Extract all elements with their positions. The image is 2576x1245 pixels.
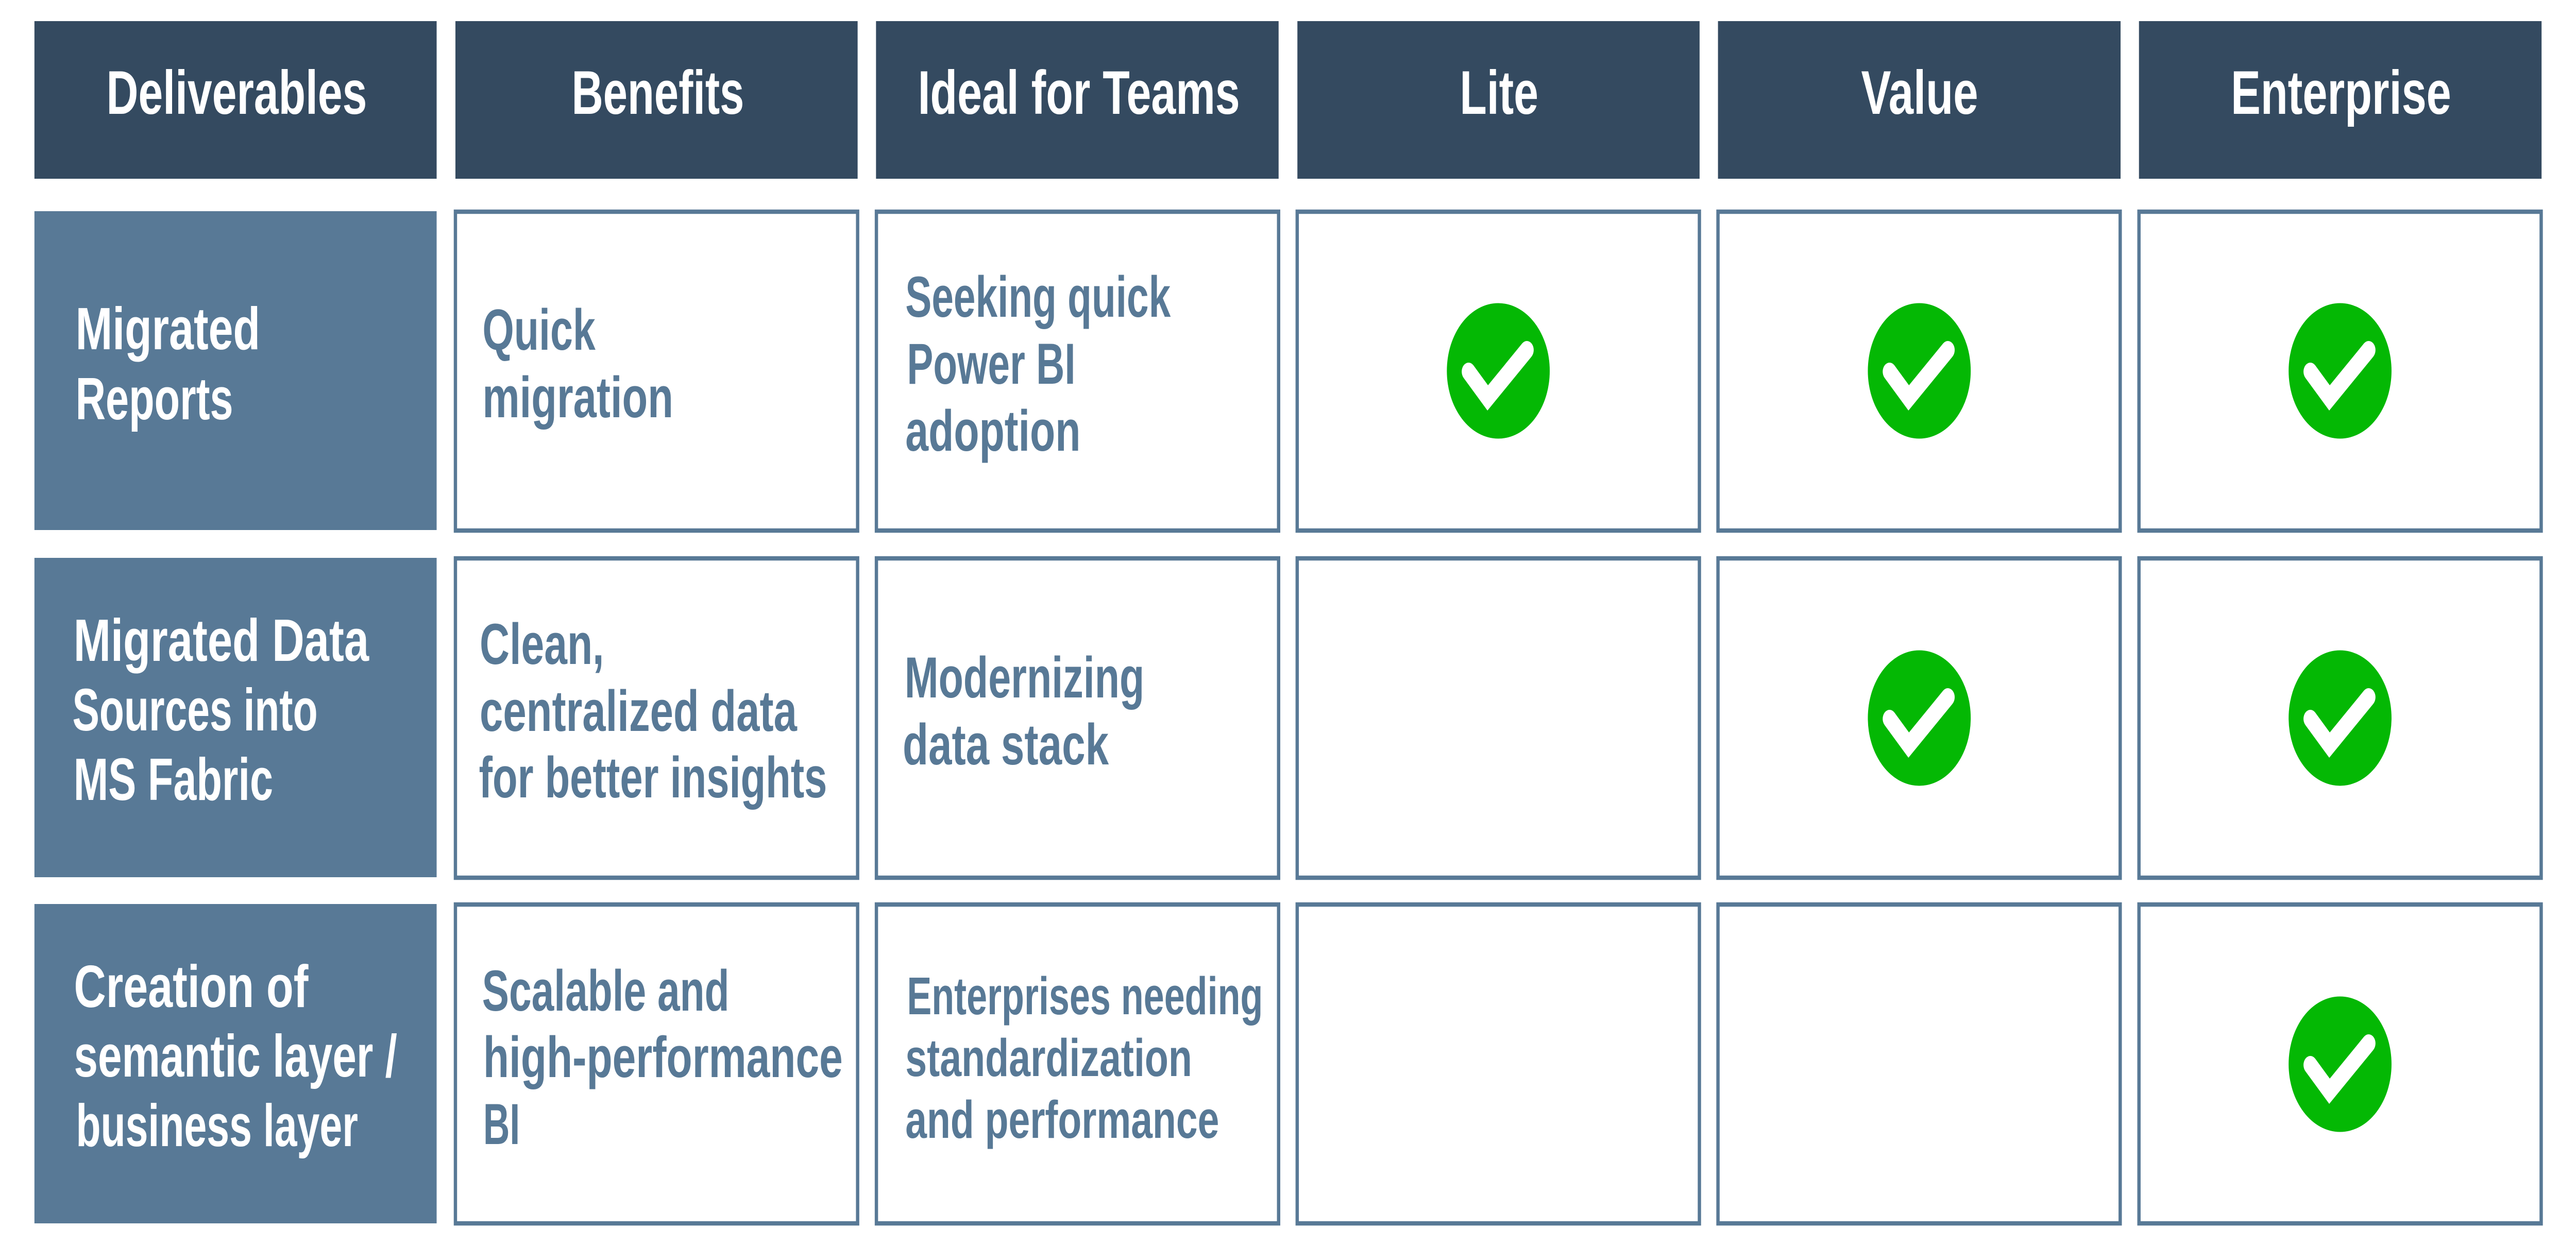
ideal-for cell: Seeking quick Power BI adoption — [876, 212, 1279, 531]
row 1: Migrated Reports — [35, 211, 2541, 531]
benefit cell: Quick migration: migration — [482, 366, 673, 430]
deliverable cell: Migrated Reports: Migrated — [76, 295, 260, 362]
ideal-for cell: Modernizing data stack: data stack — [903, 713, 1109, 777]
deliverable cell: Migrated Data Sources into MS Fabric: MS Fabric — [74, 746, 273, 813]
icon: green check — [2289, 650, 2392, 786]
header: Value — [1718, 21, 2121, 179]
benefit cell: Clean, centralized data for better insights: centralized data — [480, 679, 798, 744]
benefit cell: Scalable and high-performance BI: BI — [483, 1093, 520, 1157]
ideal-for cell: Enterprises needing standardization and performance: Enterprises needing — [907, 967, 1263, 1026]
icon: green check — [1447, 303, 1550, 439]
benefit cell: Clean, centralized data for better insights — [455, 558, 858, 878]
benefit cell: Scalable and high-performance BI — [455, 905, 858, 1223]
row 3: Creation of semantic layer / business layer — [35, 904, 2541, 1223]
deliverable cell: Migrated Data Sources into MS Fabric: Migrated Data — [74, 607, 369, 674]
header: Enterprise: Enterprise — [2231, 58, 2451, 127]
deliverable cell: Migrated Data Sources into MS Fabric — [35, 558, 437, 877]
header: Benefits: Benefits — [572, 58, 744, 127]
deliverable cell: Migrated Reports: Reports — [76, 365, 233, 432]
benefit cell: Quick migration — [455, 212, 858, 531]
icon: green check — [2289, 303, 2392, 439]
benefit cell: Clean, centralized data for better insights: Clean, — [480, 612, 604, 677]
header: Enterprise — [2139, 21, 2541, 179]
header: Ideal for Teams — [876, 21, 1279, 179]
deliverable cell: Creation of semantic layer / business layer: Creation of — [74, 953, 309, 1020]
deliverable cell: Creation of semantic layer / business layer: business layer — [76, 1092, 358, 1159]
ideal-for cell: Modernizing data stack — [876, 558, 1279, 878]
ideal-for cell: Seeking quick Power BI adoption: adoption — [905, 399, 1081, 464]
icon: green check — [1868, 650, 1971, 786]
Enterprise cell: included — [2139, 212, 2541, 531]
benefit cell: Clean, centralized data for better insights: for better insights — [479, 746, 827, 810]
header: Lite: Lite — [1460, 58, 1538, 127]
icon: green check — [2289, 996, 2392, 1132]
row 2: Migrated Data Sources into MS Fabric — [35, 558, 2541, 878]
ideal-for cell: Modernizing data stack: Modernizing — [905, 646, 1144, 710]
deliverable cell: Migrated Reports — [35, 211, 437, 530]
deliverable cell: Creation of semantic layer / business layer: semantic layer / — [74, 1022, 397, 1089]
Value cell: empty — [1718, 905, 2120, 1223]
deliverable cell: Creation of semantic layer / business layer — [35, 904, 437, 1223]
header: Lite — [1297, 21, 1700, 179]
ideal-for cell: Seeking quick Power BI adoption: Power BI — [907, 332, 1076, 397]
header row — [35, 21, 2541, 179]
header: Benefits — [455, 21, 858, 179]
deliverable cell: Migrated Data Sources into MS Fabric: Sources into — [72, 676, 318, 743]
header: Value: Value — [1861, 58, 1978, 127]
ideal-for cell: Enterprises needing standardization and performance: standardization — [905, 1029, 1192, 1088]
ideal-for cell: Seeking quick Power BI adoption: Seeking quick — [905, 265, 1171, 330]
Value cell: included — [1718, 558, 2120, 878]
Enterprise cell: included — [2139, 558, 2541, 878]
benefit cell: Quick migration: Quick — [482, 298, 596, 363]
header: Deliverables — [35, 21, 437, 179]
header: Ideal for Teams: Ideal for Teams — [918, 58, 1240, 127]
Enterprise cell: included — [2139, 905, 2541, 1223]
Value cell: included — [1718, 212, 2120, 531]
icon: green check — [1868, 303, 1971, 439]
Lite cell: empty — [1297, 558, 1700, 878]
Lite cell: empty — [1297, 905, 1700, 1223]
benefit cell: Scalable and high-performance BI: high-performance — [483, 1026, 843, 1090]
benefit cell: Scalable and high-performance BI: Scalable and — [482, 959, 730, 1024]
Lite cell: included — [1297, 212, 1700, 531]
ideal-for cell: Enterprises needing standardization and performance — [876, 905, 1279, 1223]
header: Deliverables: Deliverables — [107, 58, 367, 127]
ideal-for cell: Enterprises needing standardization and performance: and performance — [905, 1090, 1219, 1150]
